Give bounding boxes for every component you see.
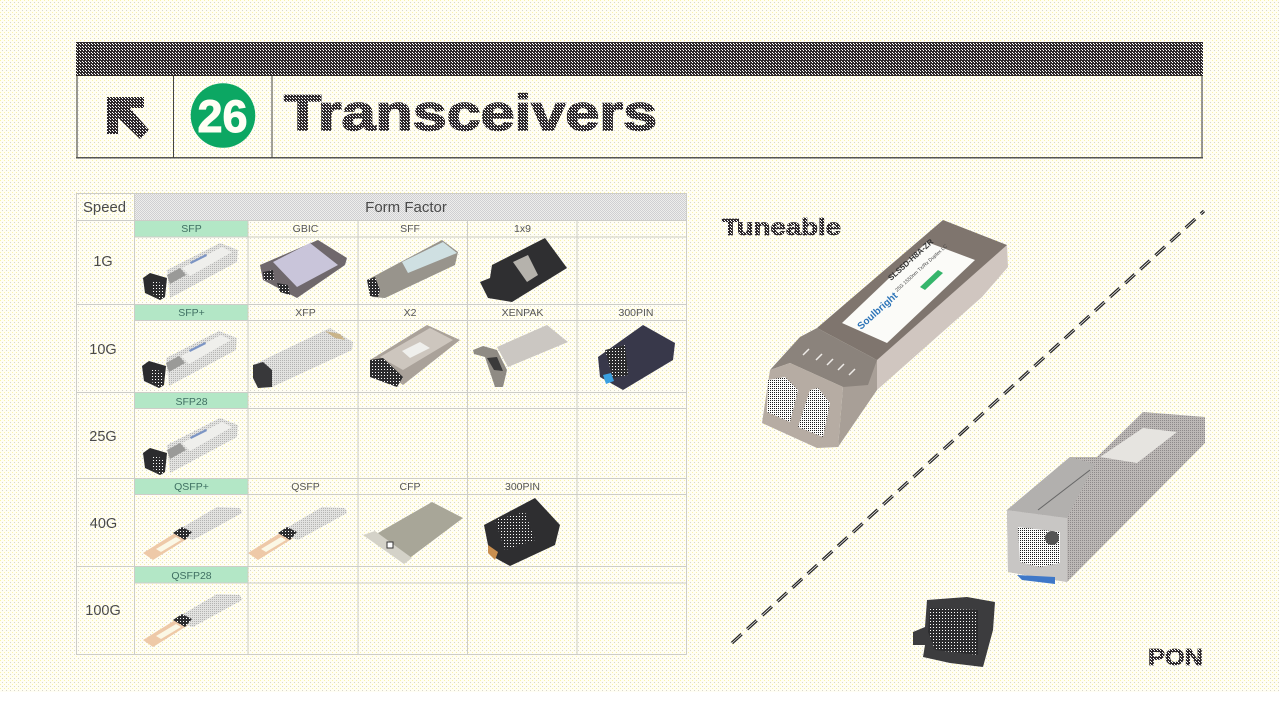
section number badge (191, 83, 255, 148)
top face near front (1007, 457, 1095, 518)
form factor table (76, 193, 687, 655)
product label (842, 237, 975, 343)
form factor labels: SFF (400, 223, 420, 235)
form factor labels: QSFP+ (174, 481, 209, 493)
module: QSFP (248, 507, 347, 560)
module: SFP+ (142, 331, 237, 388)
section number badge: 26 (197, 91, 248, 142)
diagonal dashed divider (732, 211, 1204, 643)
form factor labels: SFP28 (175, 396, 208, 408)
speed labels: 10G (89, 342, 117, 358)
title: Transceivers (284, 85, 657, 141)
tuneable SFP module (762, 220, 1008, 448)
icon: up-left arrow (107, 97, 149, 139)
front face (1007, 510, 1067, 582)
module: 1x9 (480, 238, 567, 302)
LC port right (798, 388, 830, 437)
latch section (770, 328, 877, 387)
table header row: Speed (83, 199, 126, 216)
form factor labels: QSFP (291, 481, 320, 493)
module: XFP (253, 328, 353, 388)
blue latch (1017, 575, 1055, 584)
product label: Soulbright (856, 290, 901, 332)
speed labels (85, 254, 121, 619)
module: X2 (370, 325, 460, 387)
module: 300PIN 40G (484, 498, 560, 566)
table header row: Form Factor (365, 199, 447, 216)
speed labels: 25G (89, 429, 117, 445)
module: XENPAK (473, 325, 568, 387)
module: CFP (363, 502, 463, 564)
product label: SLS5D-H8A-ZR (886, 237, 935, 282)
lower side near front (838, 360, 877, 447)
module: SFP28 (143, 418, 238, 475)
side of module (873, 245, 1008, 390)
module: GBIC (260, 240, 347, 298)
module: 300PIN 10G (598, 325, 675, 390)
module body (1007, 412, 1205, 582)
module: SFF (367, 240, 458, 298)
module: SFP (143, 243, 238, 300)
module: QSFP28 (143, 594, 242, 647)
latch slats (803, 349, 855, 375)
receptacle (1045, 531, 1059, 545)
top label (1100, 428, 1177, 463)
LC port left (767, 377, 798, 422)
form factor labels: GBIC (293, 223, 319, 235)
speed labels: 1G (93, 254, 113, 270)
form factor labels: QSFP28 (171, 570, 212, 582)
form factor labels: XFP (295, 307, 316, 319)
form factor labels: 300PIN (618, 307, 654, 319)
speed labels: 100G (85, 603, 121, 619)
label: PON: PON (1148, 644, 1203, 670)
PON SFP module (1007, 412, 1205, 584)
module: QSFP+ (143, 507, 242, 560)
form factor labels: SFP (181, 223, 202, 235)
table header row (83, 193, 687, 220)
table grid (76, 193, 687, 655)
speed labels: 40G (90, 516, 117, 532)
front frame (762, 363, 843, 448)
green highlighted form factor cells (135, 221, 248, 583)
form factor labels: X2 (404, 307, 417, 319)
form factor labels (171, 223, 654, 582)
form factor labels: 300PIN (505, 481, 540, 493)
form factor labels: XENPAK (502, 307, 543, 319)
black dust plug (913, 597, 995, 667)
header bar (76, 42, 1203, 158)
form factor labels: 1x9 (514, 223, 531, 235)
form factor labels: SFP+ (178, 307, 205, 319)
form factor labels: CFP (400, 481, 420, 493)
front opening (1018, 527, 1060, 567)
top face (817, 220, 1007, 360)
product label: 25G 1550nm Tx/Rx Duplex LC (894, 243, 949, 293)
label: Tuneable: Tuneable (722, 214, 841, 240)
